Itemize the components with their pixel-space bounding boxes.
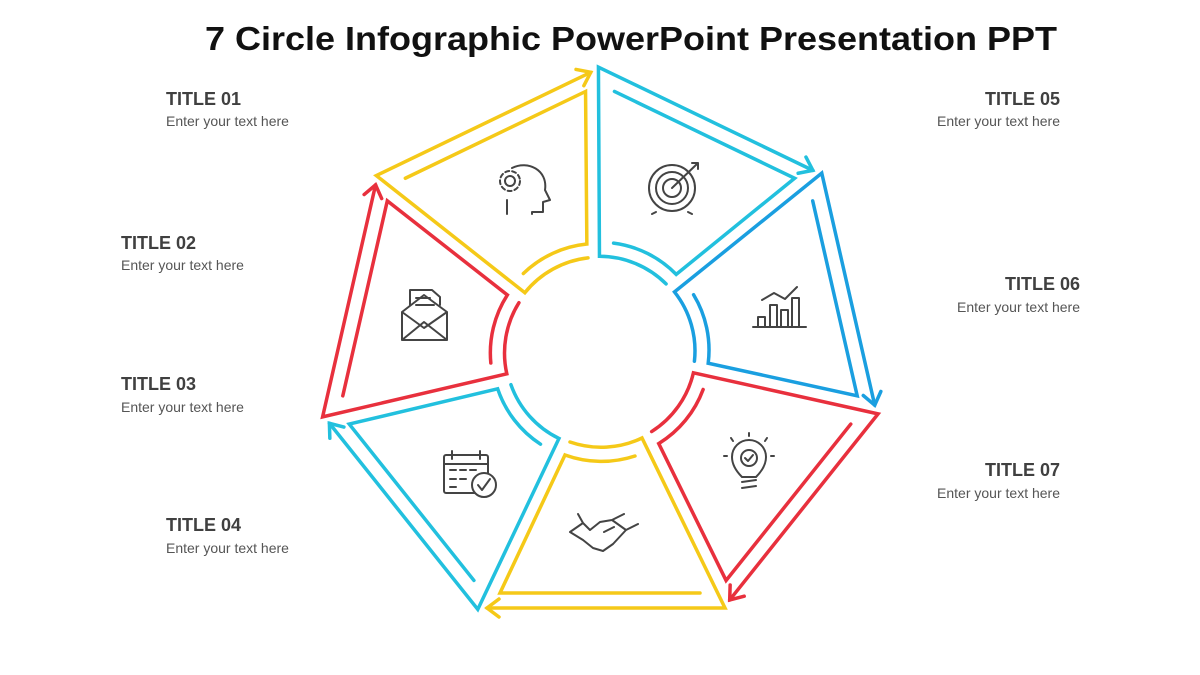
icon: calendar [444, 451, 496, 497]
icon: gear head [500, 165, 550, 214]
text: title 04: Enter your text here [166, 540, 289, 556]
text: title 01: TITLE 01 [166, 89, 241, 109]
segment: bottom yellow [487, 438, 725, 617]
text: title 07 [937, 460, 1060, 501]
icon: handshake [570, 514, 638, 551]
text: title 06 [957, 274, 1080, 315]
text: title 05: Enter your text here [937, 113, 1060, 129]
diagram: heptagon segments [314, 59, 885, 617]
segment: lower-right red [597, 308, 885, 606]
text: title 02: TITLE 02 [121, 233, 196, 253]
text: title 04: TITLE 04 [166, 515, 241, 535]
text: title 07: TITLE 07 [985, 460, 1060, 480]
segment: right blue [656, 171, 884, 443]
text: title 02: Enter your text here [121, 257, 244, 273]
segment: lower-left cyan [322, 317, 611, 615]
text: title 03 [121, 374, 244, 415]
segment: top-right cyan [525, 59, 817, 324]
icon: chart [753, 287, 806, 327]
icon: envelope [402, 290, 447, 340]
text: title 01 [166, 89, 289, 129]
text: title 05 [937, 89, 1060, 129]
text: title 06: Enter your text here [957, 299, 1080, 315]
title: 7 Circle Infographic PowerPoint Presentation PPT [205, 20, 1057, 57]
segment: left red [314, 183, 541, 455]
text: title 05: TITLE 05 [985, 89, 1060, 109]
text: title 02 [121, 233, 244, 273]
icon: target [649, 163, 698, 214]
text: title 07: Enter your text here [937, 485, 1060, 501]
text: title 04 [166, 515, 289, 556]
text: title 03: TITLE 03 [121, 374, 196, 394]
text: title 06: TITLE 06 [1005, 274, 1080, 294]
icon: light bulb [724, 433, 774, 488]
text: title 03: Enter your text here [121, 399, 244, 415]
text: title 01: Enter your text here [166, 113, 289, 129]
segment: upper-left yellow [372, 64, 665, 329]
